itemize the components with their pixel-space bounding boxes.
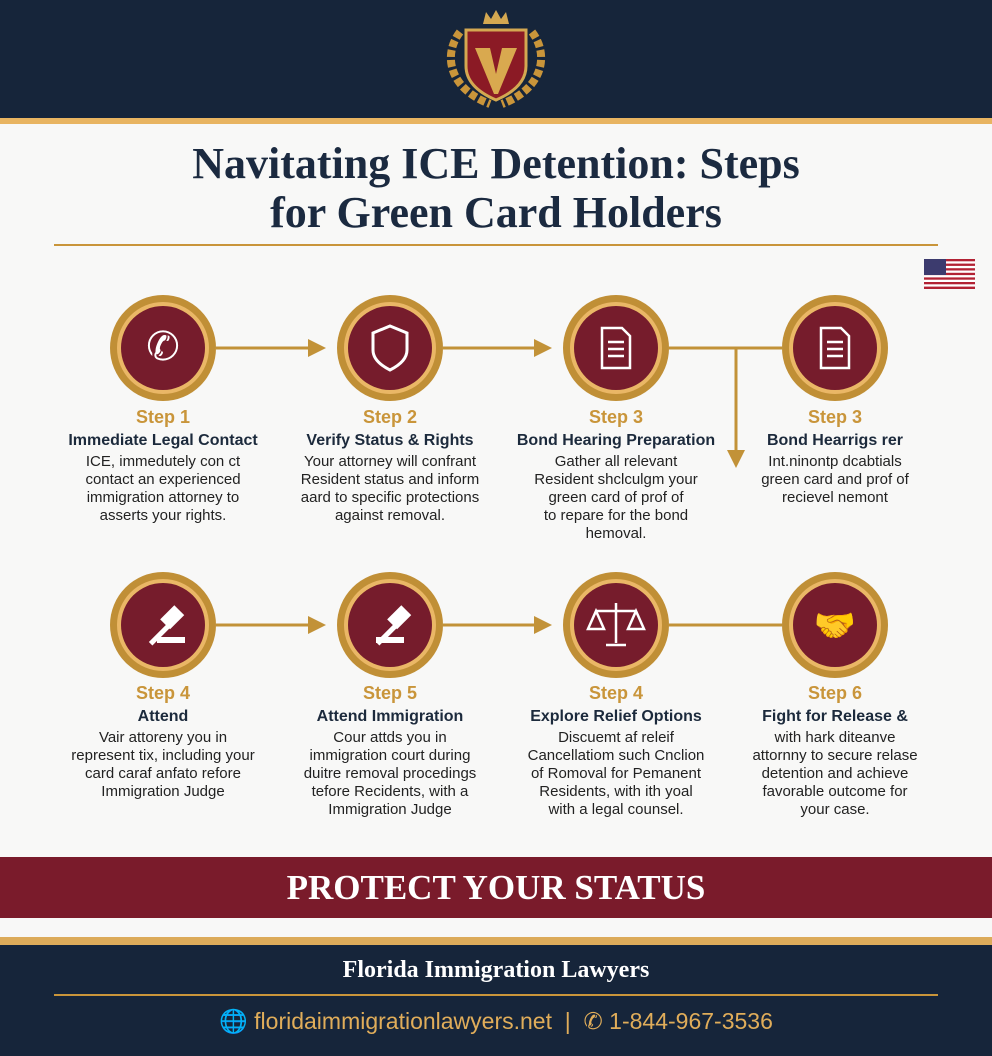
step 2: against removal.	[335, 507, 445, 524]
step 2: Resident status and inform	[301, 471, 479, 488]
step 6	[752, 683, 918, 818]
step 4	[71, 683, 255, 800]
step 5: Step 5	[363, 683, 417, 703]
step 3b: Bond Hearrigs rer	[767, 432, 903, 449]
step 5: Attend Immigration	[317, 708, 463, 725]
step icons	[110, 295, 216, 401]
step 2: Step 2	[363, 407, 417, 427]
step 6: attornny to secure relase	[752, 747, 918, 764]
step 5: Cour attds you in	[333, 729, 447, 746]
step 1: asserts your rights.	[100, 507, 226, 524]
step 3b: Step 3	[808, 407, 862, 427]
title: for Green Card Holders	[270, 188, 722, 237]
step 5: immigration court during	[310, 747, 470, 764]
step 3: Gather all relevant	[555, 453, 677, 470]
step 3: green card of prof of	[548, 489, 684, 506]
step 6: favorable outcome for	[762, 783, 908, 800]
step 4b: Explore Relief Options	[530, 708, 702, 725]
banner: PROTECT YOUR STATUS	[287, 868, 705, 907]
footer	[0, 945, 992, 1056]
step 1: Step 1	[136, 407, 190, 427]
step 6: your case.	[800, 801, 870, 818]
footer: Florida Immigration Lawyers	[343, 957, 649, 983]
step 3b: green card and prof of	[761, 471, 909, 488]
step 1	[68, 407, 258, 524]
step 1: Immediate Legal Contact	[68, 432, 258, 449]
step 4b: Step 4	[589, 683, 643, 703]
step 4: represent tix, including your	[71, 747, 255, 764]
banner	[0, 857, 992, 918]
step 4b: Discuemt af releif	[558, 729, 674, 746]
step 1: ICE, immedutely con ct	[86, 453, 240, 470]
step 2: aard to specific protections	[301, 489, 479, 506]
step 5: Immigration Judge	[328, 801, 452, 818]
step 2: Verify Status & Rights	[306, 432, 474, 449]
step 6: detention and achieve	[762, 765, 908, 782]
step 1: contact an experienced	[85, 471, 241, 488]
step 4b: of Romoval for Pemanent	[531, 765, 701, 782]
step 5: tefore Recidents, with a	[312, 783, 468, 800]
step 3b	[761, 407, 909, 506]
step 6: Step 6	[808, 683, 862, 703]
step 3: Bond Hearing Preparation	[517, 432, 715, 449]
step 2	[301, 407, 479, 524]
step 6: Fight for Release &	[762, 708, 908, 725]
step 4: Immigration Judge	[101, 783, 225, 800]
connectors and circles: 🤝	[814, 607, 856, 645]
step 3	[517, 407, 715, 542]
icon: US flag	[924, 259, 975, 289]
step 4b	[528, 683, 704, 818]
step 3: to repare for the bond	[544, 507, 688, 524]
step 5: duitre removal procedings	[304, 765, 476, 782]
step 3: Resident shclculgm your	[534, 471, 698, 488]
step 4: card caraf anfato refore	[85, 765, 241, 782]
step 6: with hark diteanve	[775, 729, 895, 746]
step 4b: Cancellatiom such Cnclion	[528, 747, 704, 764]
step 3: hemoval.	[586, 525, 646, 542]
logo crest	[446, 10, 546, 108]
step 1: immigration attorney to	[87, 489, 239, 506]
step 5	[304, 683, 476, 818]
contact line: 🌐 floridaimmigrationlawyers.net | ✆ 1-844-967-3536	[219, 1008, 773, 1034]
step 4: Attend	[138, 708, 188, 725]
header bar	[0, 0, 992, 118]
step 3b: recievel nemont	[782, 489, 888, 506]
step 3: Step 3	[589, 407, 643, 427]
step 4: Step 4	[136, 683, 190, 703]
step 4b: Residents, with ith yoal	[539, 783, 693, 800]
step 4b: with a legal counsel.	[548, 801, 684, 818]
step icons: ✆	[146, 325, 180, 369]
step 3b: Int.ninontp dcabtials	[768, 453, 902, 470]
step 4: Vair attoreny you in	[99, 729, 227, 746]
title	[192, 139, 800, 237]
step 2: Your attorney will confrant	[304, 453, 476, 470]
title: Navitating ICE Detention: Steps	[192, 139, 800, 188]
